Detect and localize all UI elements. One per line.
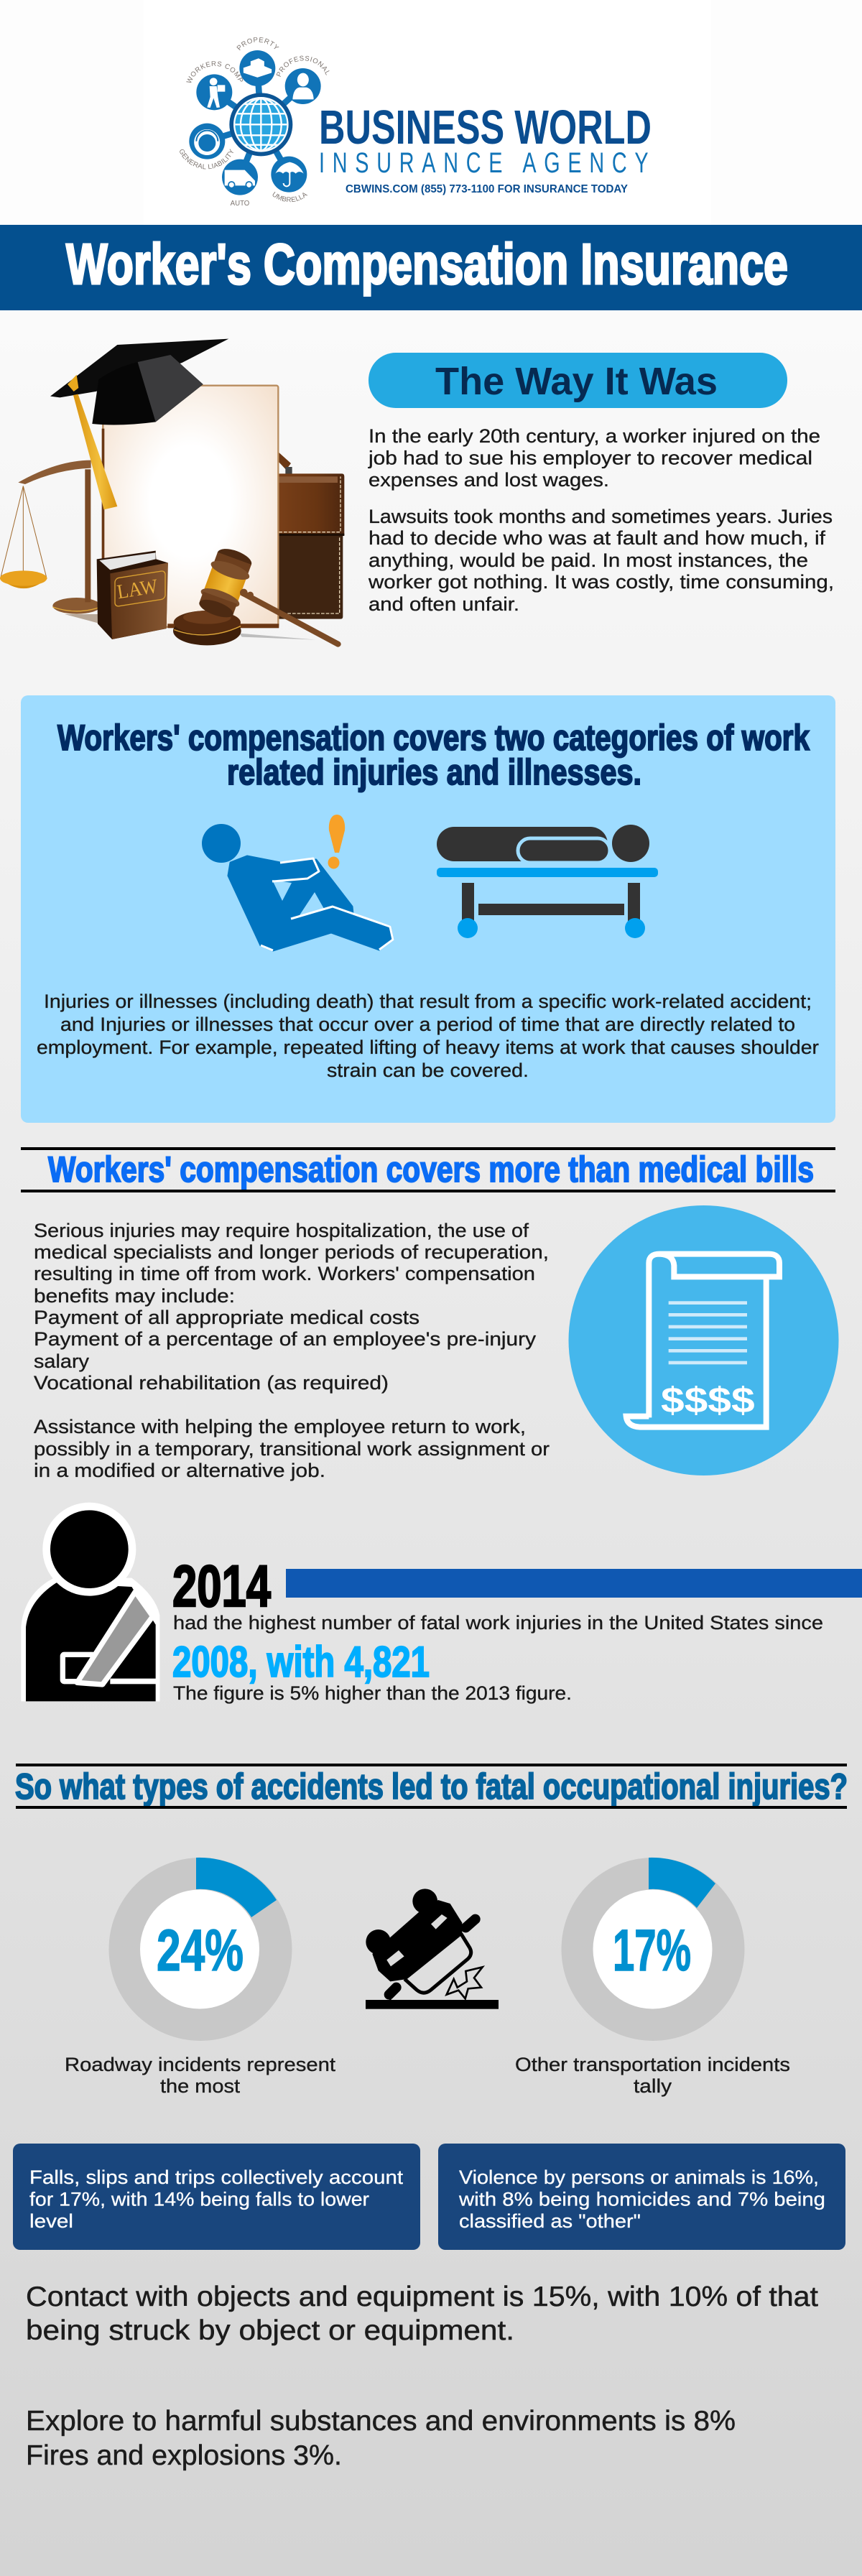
text block: contact with objects: Contact with objects and equipment is 15%, with 10% of that xyxy=(26,2281,818,2312)
panel text xyxy=(37,991,819,1081)
logo wordmark: BUSINESS WORLD xyxy=(319,101,652,154)
parchment sheet xyxy=(103,386,278,627)
text block: the way it was: had to decide who was at fault and how much, if xyxy=(369,527,826,549)
caption: roadway: Roadway incidents represent xyxy=(65,2054,336,2075)
panel text: employment. For example, repeated lifting of heavy items at work that causes shoulder xyxy=(37,1037,819,1058)
panel heading: related injuries and illnesses. xyxy=(227,752,641,792)
text block: the way it was xyxy=(368,425,834,615)
text block: benefits: possibly in a temporary, transitional work assignment or xyxy=(34,1438,550,1460)
callout: violence: classified as "other" xyxy=(459,2210,641,2232)
donut chart: roadway 24% xyxy=(109,1858,292,2041)
logo emblem xyxy=(180,37,329,208)
icon: patient on gurney xyxy=(437,825,658,938)
decorative bar xyxy=(286,1569,862,1598)
title banner xyxy=(0,225,862,310)
logo: Business World Insurance Agency xyxy=(180,37,652,208)
logo ring labels: WORKERS COMP xyxy=(186,61,243,83)
logo ring labels: UMBRELLA xyxy=(273,191,307,203)
caption: other transportation: Other transportation incidents xyxy=(515,2054,790,2075)
panel: two categories xyxy=(21,695,835,1123)
icon: umbrella xyxy=(275,162,304,174)
callout: falls xyxy=(13,2144,420,2250)
text block: harmful substances: Fires and explosions 3%. xyxy=(26,2440,342,2471)
stat: 2014: 2014 xyxy=(172,1554,271,1619)
logo ring labels xyxy=(180,37,329,208)
callout: falls: for 17%, with 14% being falls to lower xyxy=(29,2188,369,2210)
callout: falls: Falls, slips and trips collectively account xyxy=(29,2167,404,2188)
text block: benefits: benefits may include: xyxy=(34,1285,235,1307)
text block: the way it was: and often unfair. xyxy=(369,593,519,615)
gavel xyxy=(173,545,338,645)
icon: van xyxy=(225,170,255,185)
caption: roadway xyxy=(65,2054,336,2097)
donut chart: other transportation 17%: 17% xyxy=(613,1918,691,1983)
text block: the way it was: Lawsuits took months and sometimes years. Juries xyxy=(369,506,833,527)
text block: benefits: Payment of all appropriate medical costs xyxy=(34,1307,420,1328)
logo ring labels: AUTO xyxy=(231,200,250,208)
heading pill: The Way It Was xyxy=(369,353,787,408)
graduation cap xyxy=(50,339,228,509)
donut chart: other transportation 17% xyxy=(562,1858,744,2041)
icon: building xyxy=(243,58,272,78)
logo ring labels: PROPERTY xyxy=(236,37,279,50)
panel text: strain can be covered. xyxy=(327,1060,529,1081)
logo contact line: CBWINS.COM (855) 773-1100 FOR INSURANCE TODAY xyxy=(346,183,628,195)
icon: overturned car xyxy=(366,1889,499,2009)
heading pill: The Way It Was: The Way It Was xyxy=(435,360,718,403)
panel text: Injuries or illnesses (including death) that result from a specific work-related accident; xyxy=(44,991,812,1012)
text block: the way it was: expenses and lost wages. xyxy=(369,469,609,491)
panel text: and Injuries or illnesses that occur over a period of time that are directly related to xyxy=(60,1014,795,1035)
icon: bill scroll in circle xyxy=(569,1205,839,1475)
text block: benefits: medical specialists and longer periods of recuperation, xyxy=(34,1241,549,1263)
text block: benefits: Assistance with helping the employee return to work, xyxy=(34,1416,526,1437)
callout: violence: Violence by persons or animals is 16%, xyxy=(459,2167,819,2188)
briefcase xyxy=(275,453,344,619)
stat note: The figure is 5% higher than the 2013 figure. xyxy=(173,1682,572,1704)
icon: worker carrying box xyxy=(207,78,225,108)
text block: contact with objects: being struck by object or equipment. xyxy=(26,2315,514,2346)
logo ring labels: PROFESSIONAL xyxy=(276,56,329,77)
caption: roadway: the most xyxy=(160,2075,241,2097)
scales of justice xyxy=(0,460,101,624)
text block: benefits: resulting in time off from work. Workers' compensation xyxy=(34,1263,535,1284)
text block: benefits: Serious injuries may require hospitalization, the use of xyxy=(34,1220,529,1241)
text block: benefits: in a modified or alternative job. xyxy=(34,1460,325,1481)
caption: other transportation xyxy=(515,2054,790,2097)
text block: benefits xyxy=(34,1220,550,1481)
text block: benefits: salary xyxy=(34,1350,90,1372)
donut chart: roadway 24%: 24% xyxy=(157,1918,244,1983)
stat: 2008, with 4,821: 2008, with 4,821 xyxy=(172,1638,430,1686)
caption: other transportation: tally xyxy=(634,2075,672,2097)
text block: the way it was: In the early 20th century, a worker injured on the xyxy=(369,425,820,447)
icon: injured seated person xyxy=(202,815,393,950)
law book xyxy=(97,551,168,639)
callout: violence: with 8% being homicides and 7% being xyxy=(458,2188,825,2210)
text block: benefits: Vocational rehabilitation (as required) xyxy=(34,1372,389,1394)
panel heading xyxy=(57,718,810,792)
icon: bill scroll in circle: $$$$ xyxy=(661,1381,755,1421)
stat text: had the highest number of fatal work injuries in the United States since xyxy=(173,1612,823,1634)
text block: the way it was: job had to sue his employer to recover medical xyxy=(368,447,812,468)
icon: headset agent xyxy=(194,129,220,155)
law book: LAW xyxy=(116,575,159,603)
text block: the way it was: anything, would be paid. In most instances, the xyxy=(369,550,808,571)
callout: falls: level xyxy=(29,2210,73,2232)
text block: the way it was: worker got nothing. It was costly, time consuming, xyxy=(368,571,834,593)
icon: person with arm sling xyxy=(21,1503,159,1701)
text block: harmful substances xyxy=(26,2406,736,2471)
text block: contact with objects xyxy=(26,2281,818,2346)
text block: benefits: Payment of a percentage of an employee's pre-injury xyxy=(34,1328,537,1350)
callout: violence xyxy=(438,2144,845,2250)
illustration: law still life xyxy=(0,339,344,645)
logo subtitle: INSURANCE AGENCY xyxy=(319,147,649,179)
text block: harmful substances: Explore to harmful substances and environments is 8% xyxy=(26,2406,736,2437)
icon: professional xyxy=(292,73,314,99)
logo ring labels: GENERAL LIABILITY xyxy=(180,149,233,170)
